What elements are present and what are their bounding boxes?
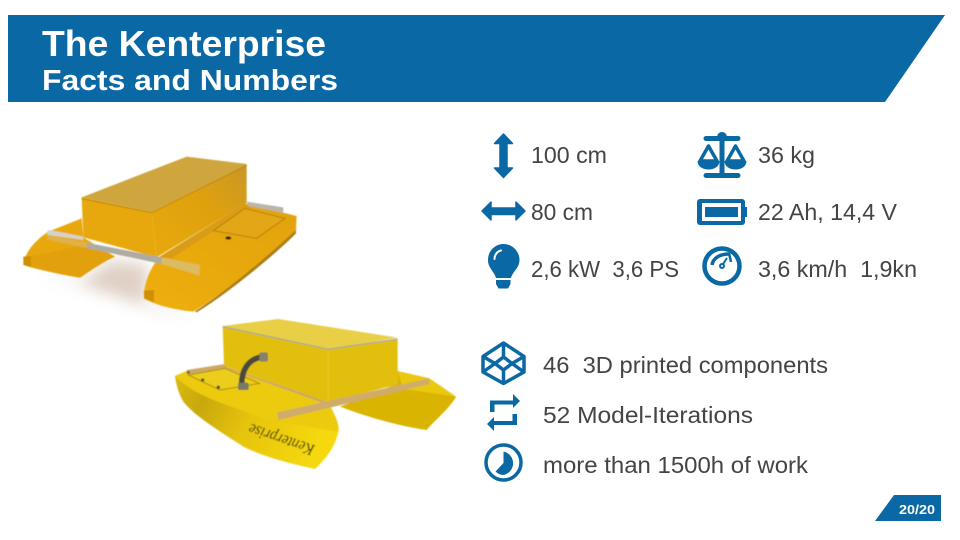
power value: 2,6 kW 3,6 PS (531, 256, 679, 282)
boat name lettering: Kenterprise (245, 419, 317, 460)
weight value: 36 kg (758, 142, 815, 168)
icon: iteration arrows (487, 394, 520, 431)
subtitle: Facts and Numbers (42, 65, 338, 97)
image: rendered boat model (23, 157, 297, 317)
width value: 80 cm (531, 199, 593, 225)
battery value: 22 Ah, 14,4 V (758, 199, 898, 225)
page number tab: 20/20 (899, 502, 935, 517)
icon: light bulb (488, 244, 520, 288)
speed value: 3,6 km/h 1,9kn (758, 256, 917, 282)
icon: height arrow (494, 134, 512, 178)
icon: width arrow (482, 202, 525, 220)
header banner (8, 15, 945, 102)
components text: 46 3D printed components (543, 352, 828, 378)
icon: weighing scale (698, 132, 746, 176)
height value: 100 cm (531, 142, 607, 168)
icon: 3D cube (483, 343, 524, 384)
image: photo of printed boat (175, 319, 456, 469)
icon: speedometer (704, 248, 740, 284)
work hours text: more than 1500h of work (543, 452, 809, 478)
iterations text: 52 Model-Iterations (543, 402, 753, 428)
page number tab (875, 495, 941, 521)
icon: battery (697, 199, 747, 225)
title: The Kenterprise (42, 23, 326, 64)
icon: clock pie (486, 445, 521, 480)
